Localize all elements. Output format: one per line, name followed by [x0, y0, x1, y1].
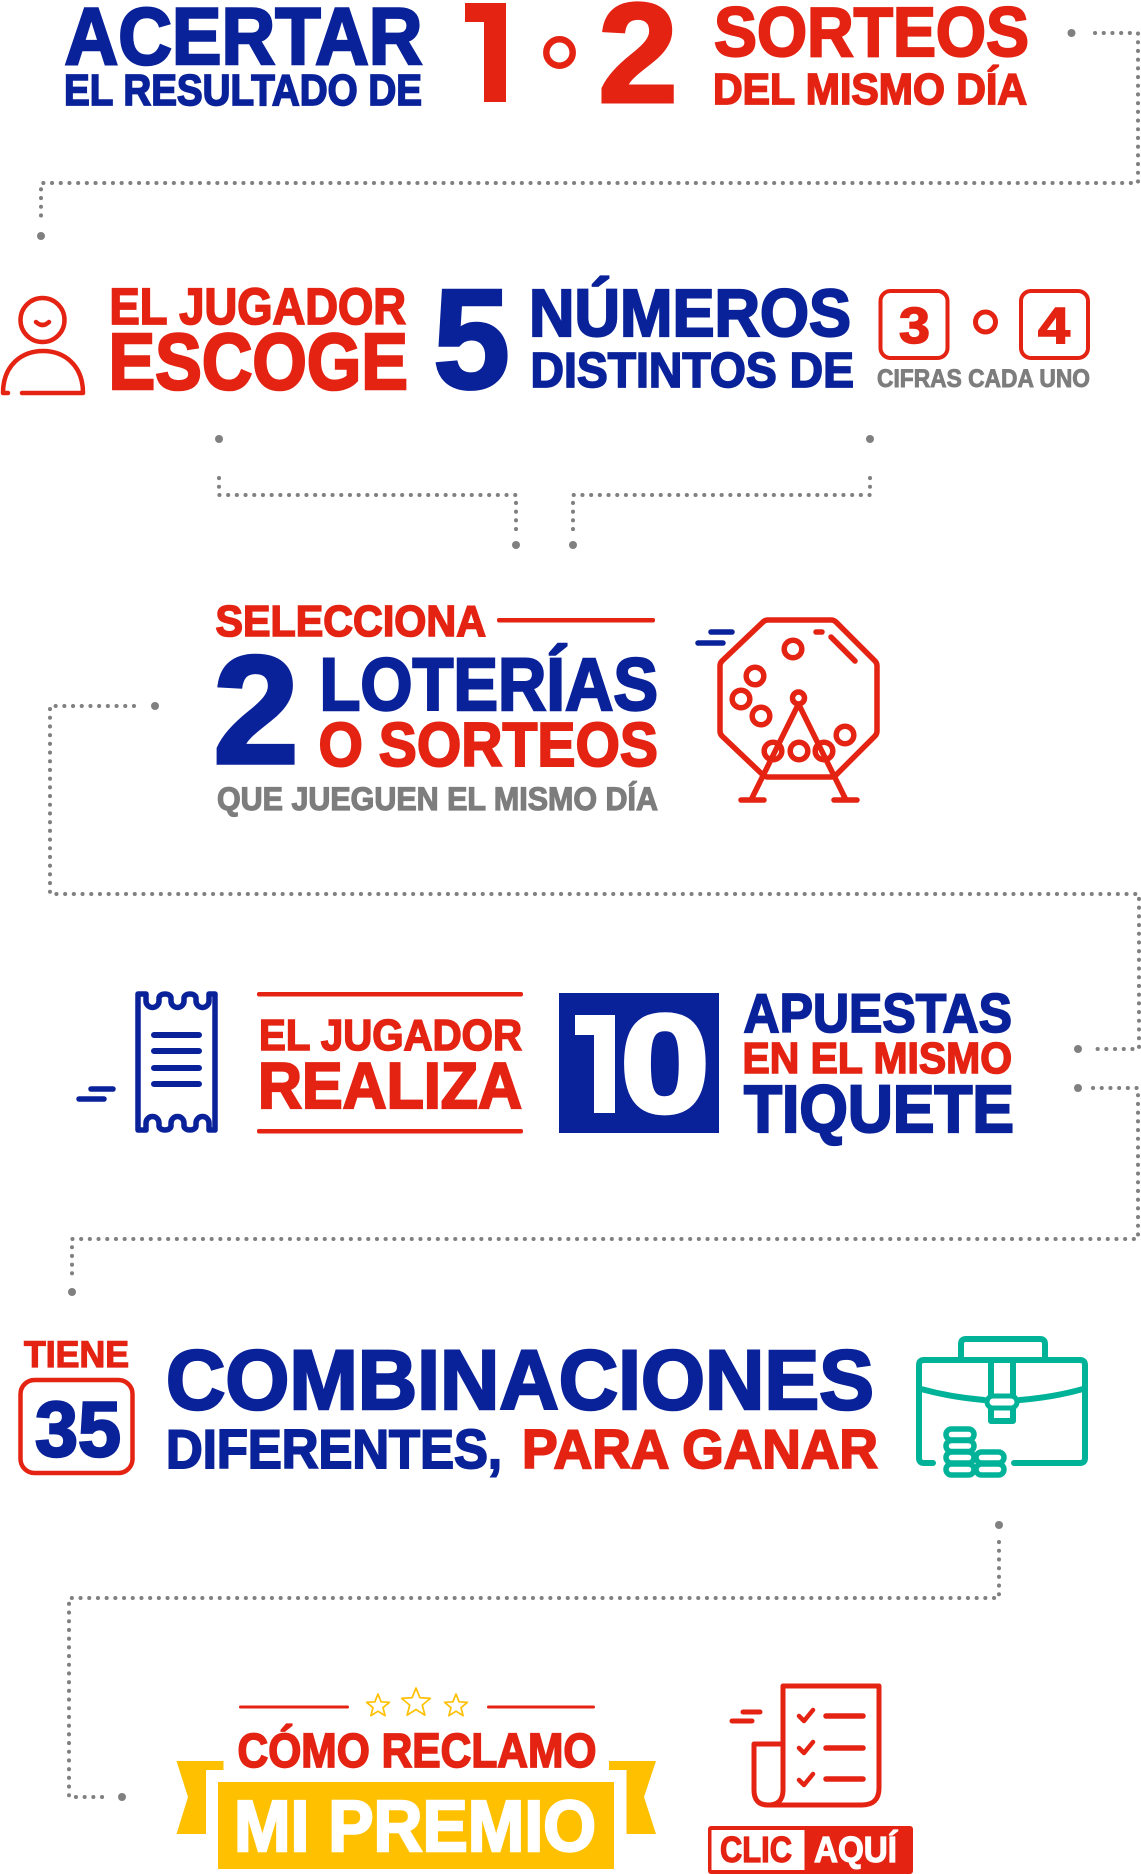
- icon: ticket: [79, 994, 215, 1130]
- icon: lottery drum: [698, 620, 877, 800]
- badge: 4: [1021, 291, 1088, 358]
- heading: apuestas: APUESTAS: [744, 982, 1012, 1044]
- panel: step 5 combinaciones: [20, 1333, 1085, 1480]
- text: cifras cada uno: CIFRAS CADA UNO: [877, 365, 1090, 393]
- text: el jugador: EL JUGADOR: [259, 1011, 522, 1060]
- rule: right: [487, 1706, 595, 1708]
- badge: 10: 0: [620, 985, 710, 1142]
- heading: numeros: NÚMEROS: [529, 276, 851, 351]
- icon: o separator: [546, 39, 573, 66]
- rule: top: [257, 992, 523, 996]
- heading: tiquete: TIQUETE: [744, 1072, 1014, 1147]
- text: el jugador: EL JUGADOR: [110, 278, 406, 335]
- icon: briefcase with coins: [919, 1339, 1085, 1475]
- text: para ganar: PARA GANAR: [522, 1418, 878, 1480]
- icon: checklist document: [732, 1686, 879, 1805]
- text: como reclamo: CÓMO RECLAMO: [238, 1723, 596, 1778]
- badge: 3: [880, 291, 948, 358]
- text: distintos de: DISTINTOS DE: [530, 344, 854, 398]
- rule: [497, 618, 655, 622]
- number: 2: 2: [213, 624, 299, 796]
- icon: o separator: [976, 312, 996, 332]
- text: tiene: TIENE: [24, 1334, 129, 1375]
- text: que jueguen: QUE JUEGUEN EL MISMO DÍA: [217, 781, 658, 817]
- connector: step 4 to step 5: [68, 1084, 1138, 1296]
- text: diferentes: DIFERENTES,: [166, 1418, 502, 1480]
- icon: stars: [367, 1688, 467, 1716]
- button: clic aqui: AQUÍ: [814, 1829, 898, 1870]
- banner: mi premio: MI PREMIO: [234, 1787, 596, 1867]
- connector: step 3 to step 4: [50, 702, 1139, 1053]
- panel: step 3 selecciona: [213, 597, 877, 817]
- heading: o sorteos: O SORTEOS: [318, 711, 658, 780]
- badge: 4: 4: [1038, 297, 1071, 354]
- number: 1: [465, 3, 506, 102]
- button: clic aqui: CLIC: [720, 1829, 792, 1870]
- text: en el mismo: EN EL MISMO: [742, 1034, 1012, 1083]
- badge: 10: 1: [562, 985, 640, 1142]
- rule: bottom: [257, 1129, 523, 1134]
- badge: 35: 35: [35, 1385, 121, 1473]
- ribbon: right tail: [609, 1761, 656, 1834]
- panel: step 2 escoge: [3, 260, 1090, 419]
- text: del mismo dia: DEL MISMO DÍA: [713, 64, 1027, 114]
- panel: step 1 acertar: [64, 1, 1028, 106]
- text: el resultado de: EL RESULTADO DE: [64, 66, 422, 115]
- number: 5: 5: [433, 260, 510, 419]
- connector: step 5 to step 6: [69, 1521, 1003, 1801]
- heading: loterias: LOTERÍAS: [320, 643, 658, 726]
- heading: combinaciones: COMBINACIONES: [166, 1333, 874, 1427]
- connector: step 2 to step 3: [215, 435, 874, 549]
- panel: step 6 reclamar premio: [176, 1686, 913, 1874]
- badge: 10: [559, 993, 719, 1133]
- heading: escoge: ESCOGE: [108, 317, 408, 406]
- text: selecciona: SELECCIONA: [216, 597, 486, 646]
- icon: player: [3, 298, 83, 393]
- connector: step 1 to step 2: [37, 29, 1138, 240]
- badge: 3: 3: [899, 297, 930, 354]
- rule: left: [239, 1706, 349, 1708]
- panel: step 4 realiza: [79, 982, 1014, 1147]
- button: clic aqui: [708, 1826, 913, 1874]
- ribbon: left tail: [176, 1761, 224, 1834]
- heading: realiza: REALIZA: [258, 1049, 522, 1122]
